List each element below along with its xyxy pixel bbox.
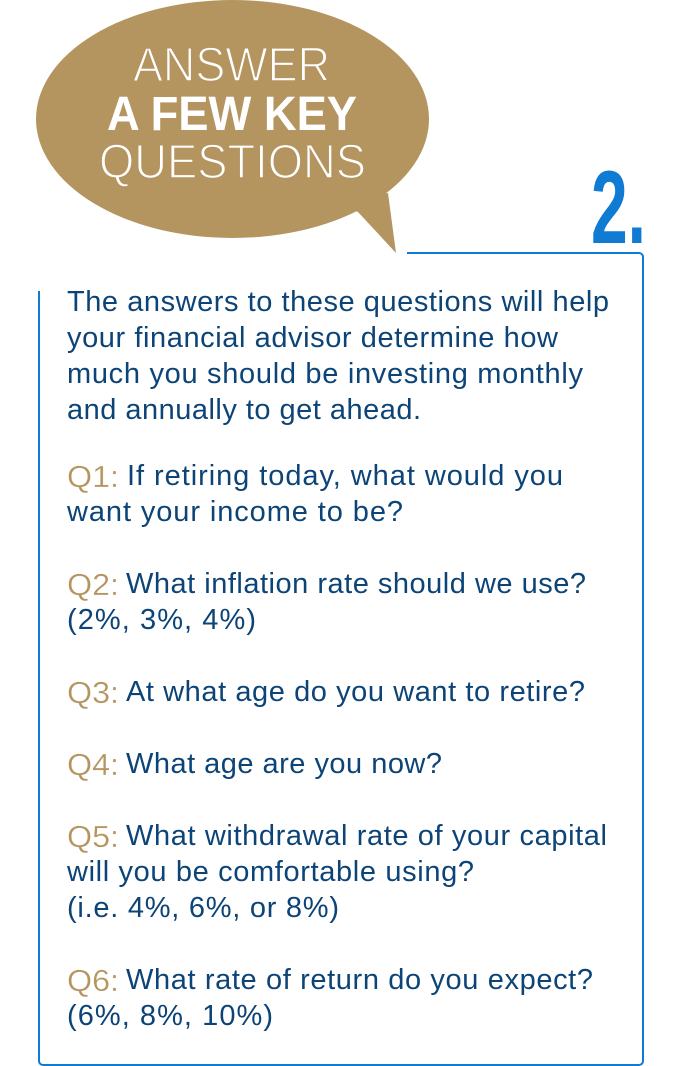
question 1: Q1: [67,459,119,494]
title: QUESTIONS [99,136,366,189]
question 2: (2%, 3%, 4%) [67,604,256,636]
question 6: (6%, 8%, 10%) [67,1000,273,1032]
title: ANSWER [133,39,330,92]
step number: 2. [591,150,646,266]
question 5: Q5: [67,819,119,854]
question 2 [67,567,586,636]
question 2: Q2: [67,567,119,602]
question 1: want your income to be? [66,496,403,528]
title: A FEW KEY [107,88,357,141]
intro text: The answers to these questions will help [67,286,609,318]
question 1 [66,459,563,528]
question 5: (i.e. 4%, 6%, or 8%) [67,892,339,924]
question 5 [66,819,607,924]
intro text: and annually to get ahead. [67,394,421,426]
question 2: What inflation rate should we use? [126,568,586,600]
question 4: What age are you now? [126,748,442,780]
intro text: much you should be investing monthly [67,358,584,390]
question 6: Q6: [67,963,119,998]
panel border [39,253,643,1065]
title [99,39,366,189]
question 6: What rate of return do you expect? [126,964,593,996]
question 6 [67,963,593,1032]
intro text [67,286,609,426]
question 5: will you be comfortable using? [66,856,474,888]
question 3: At what age do you want to retire? [126,676,585,708]
speech bubble [36,0,429,253]
question 4: Q4: [67,747,119,782]
question 1: If retiring today, what would you [127,460,563,492]
question 3: Q3: [67,675,119,710]
intro text: your financial advisor determine how [67,322,559,354]
question 5: What withdrawal rate of your capital [126,820,607,852]
